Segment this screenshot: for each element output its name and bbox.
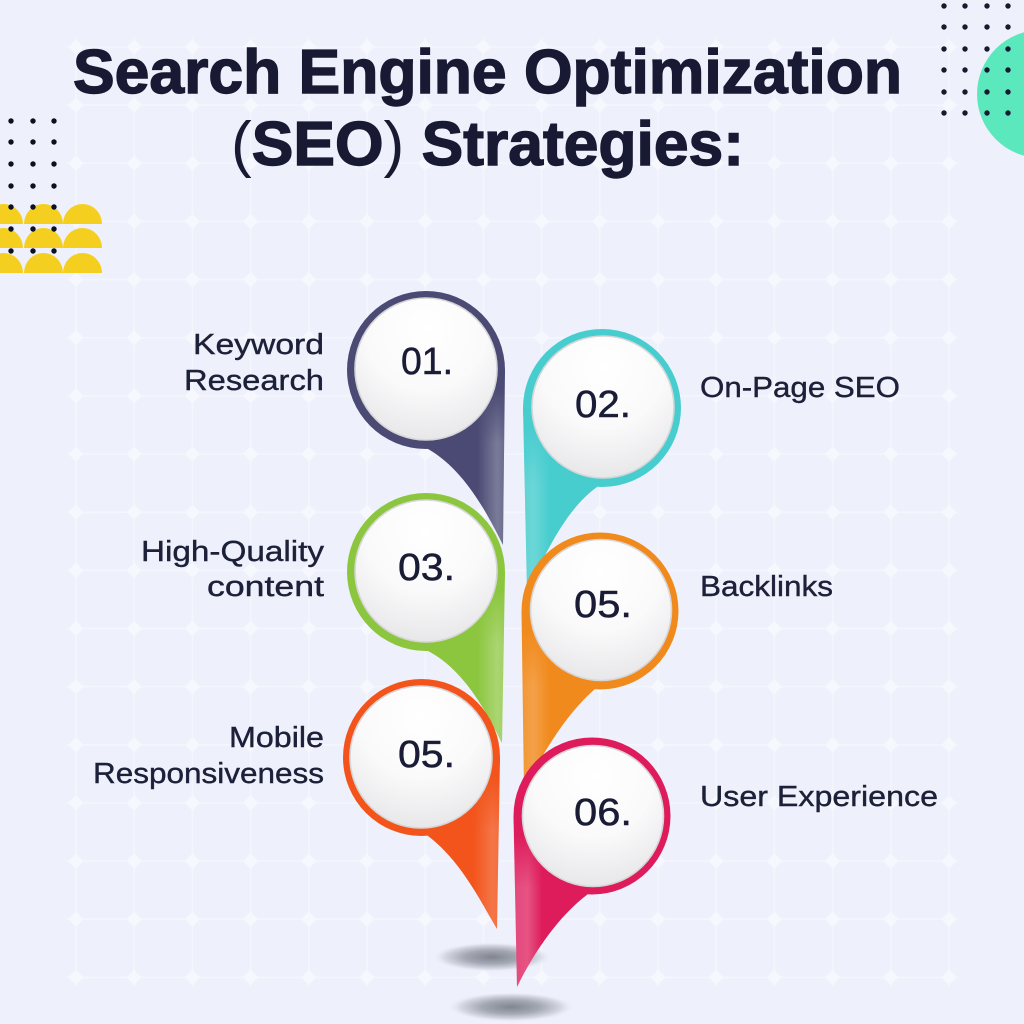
- ground shadow: left pin: [432, 942, 552, 972]
- label: High-Quality content: [141, 536, 325, 603]
- title: [73, 38, 902, 179]
- label: Keyword Research: [184, 329, 324, 397]
- pin 03: [347, 493, 505, 743]
- pin 03: 03.: [398, 547, 455, 589]
- pin 04 (labelled 05.): [522, 532, 678, 790]
- pin 02: [523, 329, 681, 592]
- title: Search Engine Optimization: [73, 38, 902, 107]
- label: On-Page SEO: On-Page SEO: [700, 372, 900, 404]
- decoration: yellow half-moons: [0, 204, 102, 273]
- title: (SEO) Strategies:: [231, 110, 744, 179]
- pin 01: [347, 291, 505, 545]
- pin 05: 05.: [398, 734, 455, 776]
- pin 04 (labelled 05.): 05.: [574, 584, 632, 626]
- label: Mobile Responsiveness: Responsiveness: [93, 758, 324, 790]
- label: High-Quality content: content: [207, 571, 324, 603]
- decoration: left dots: [8, 118, 57, 254]
- label: Keyword Research: Research: [184, 365, 324, 397]
- decoration: top-right dots: [941, 3, 1011, 116]
- pin 05: [343, 679, 500, 929]
- pin 06: 06.: [574, 792, 632, 834]
- decoration: green circle: [977, 30, 1024, 158]
- ground shadow: right pin: [447, 992, 575, 1022]
- label: Mobile Responsiveness: [93, 722, 324, 790]
- label: Mobile Responsiveness: Mobile: [229, 722, 324, 754]
- label: Keyword Research: Keyword: [193, 329, 324, 361]
- pin 01: 01.: [401, 341, 453, 383]
- label: Backlinks: Backlinks: [700, 571, 833, 603]
- pin 02: 02.: [575, 384, 631, 426]
- label: High-Quality content: High-Quality: [141, 536, 325, 568]
- pin 06: [514, 738, 670, 987]
- label: User Experience: User Experience: [700, 781, 938, 813]
